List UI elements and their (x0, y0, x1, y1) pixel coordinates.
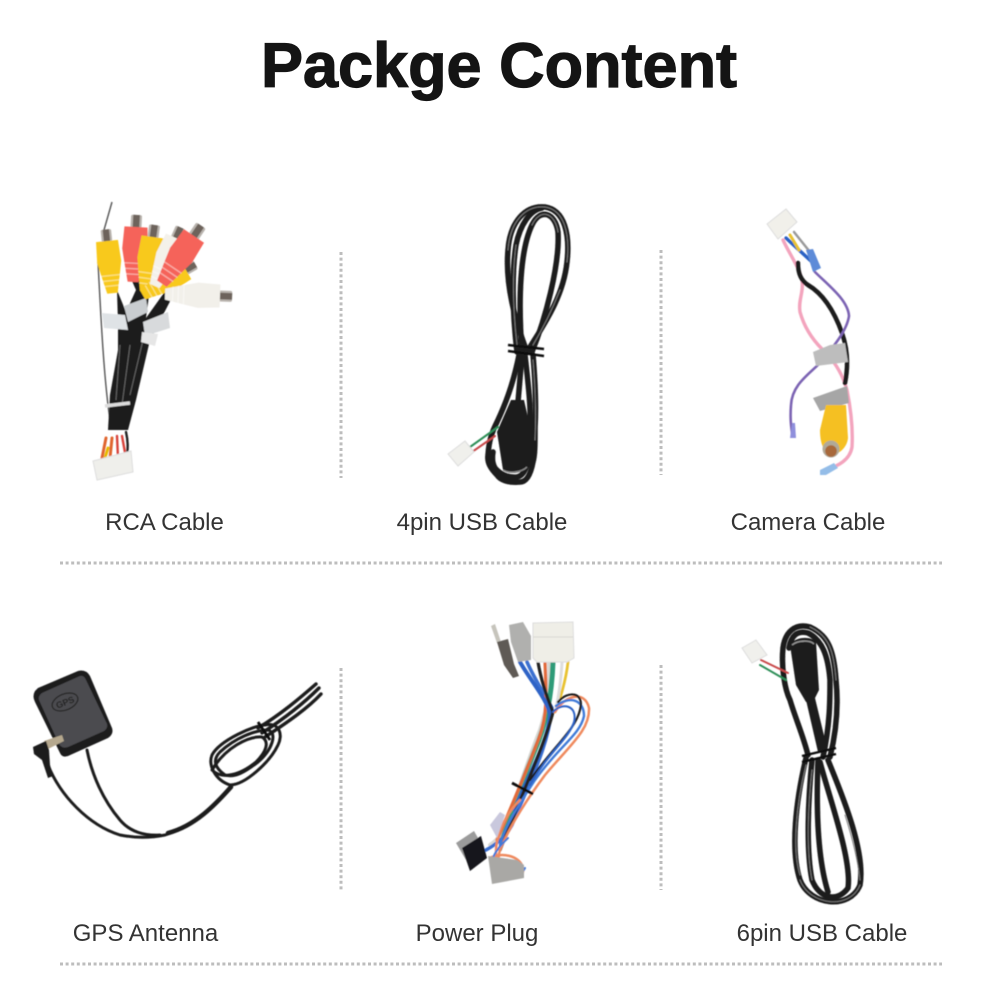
divider: row one vertical left (340, 252, 342, 478)
divider: row two vertical left (340, 668, 342, 892)
icon: power plug harness (456, 622, 589, 884)
label: Camera Cable: Camera Cable (731, 509, 885, 536)
item: 4pin USB cable (397, 207, 568, 536)
title: Packge Content (261, 31, 737, 101)
divider: row one vertical right (660, 250, 662, 475)
icon: RCA cable harness (93, 202, 233, 480)
label: GPS Antenna: GPS Antenna (73, 920, 219, 947)
icon: 6pin USB cable (742, 626, 861, 902)
text: GPS marking: GPS (54, 694, 76, 711)
item: camera cable (731, 209, 885, 536)
item: RCA cable (93, 202, 233, 536)
label: Power Plug: Power Plug (416, 920, 538, 947)
item: 6pin USB cable (737, 626, 907, 947)
label: RCA Cable: RCA Cable (105, 509, 224, 536)
item: GPS antenna (33, 671, 321, 947)
icon: GPS antenna (33, 671, 321, 837)
icon: 4pin USB cable (448, 207, 568, 482)
divider: row two horizontal (60, 962, 942, 966)
item: power plug (416, 622, 589, 947)
label: 6pin USB Cable: 6pin USB Cable (737, 920, 907, 947)
divider: row one horizontal (60, 562, 942, 564)
divider: row two vertical right (660, 665, 662, 890)
label: 4pin USB Cable: 4pin USB Cable (397, 509, 567, 536)
icon: camera cable (767, 209, 852, 475)
